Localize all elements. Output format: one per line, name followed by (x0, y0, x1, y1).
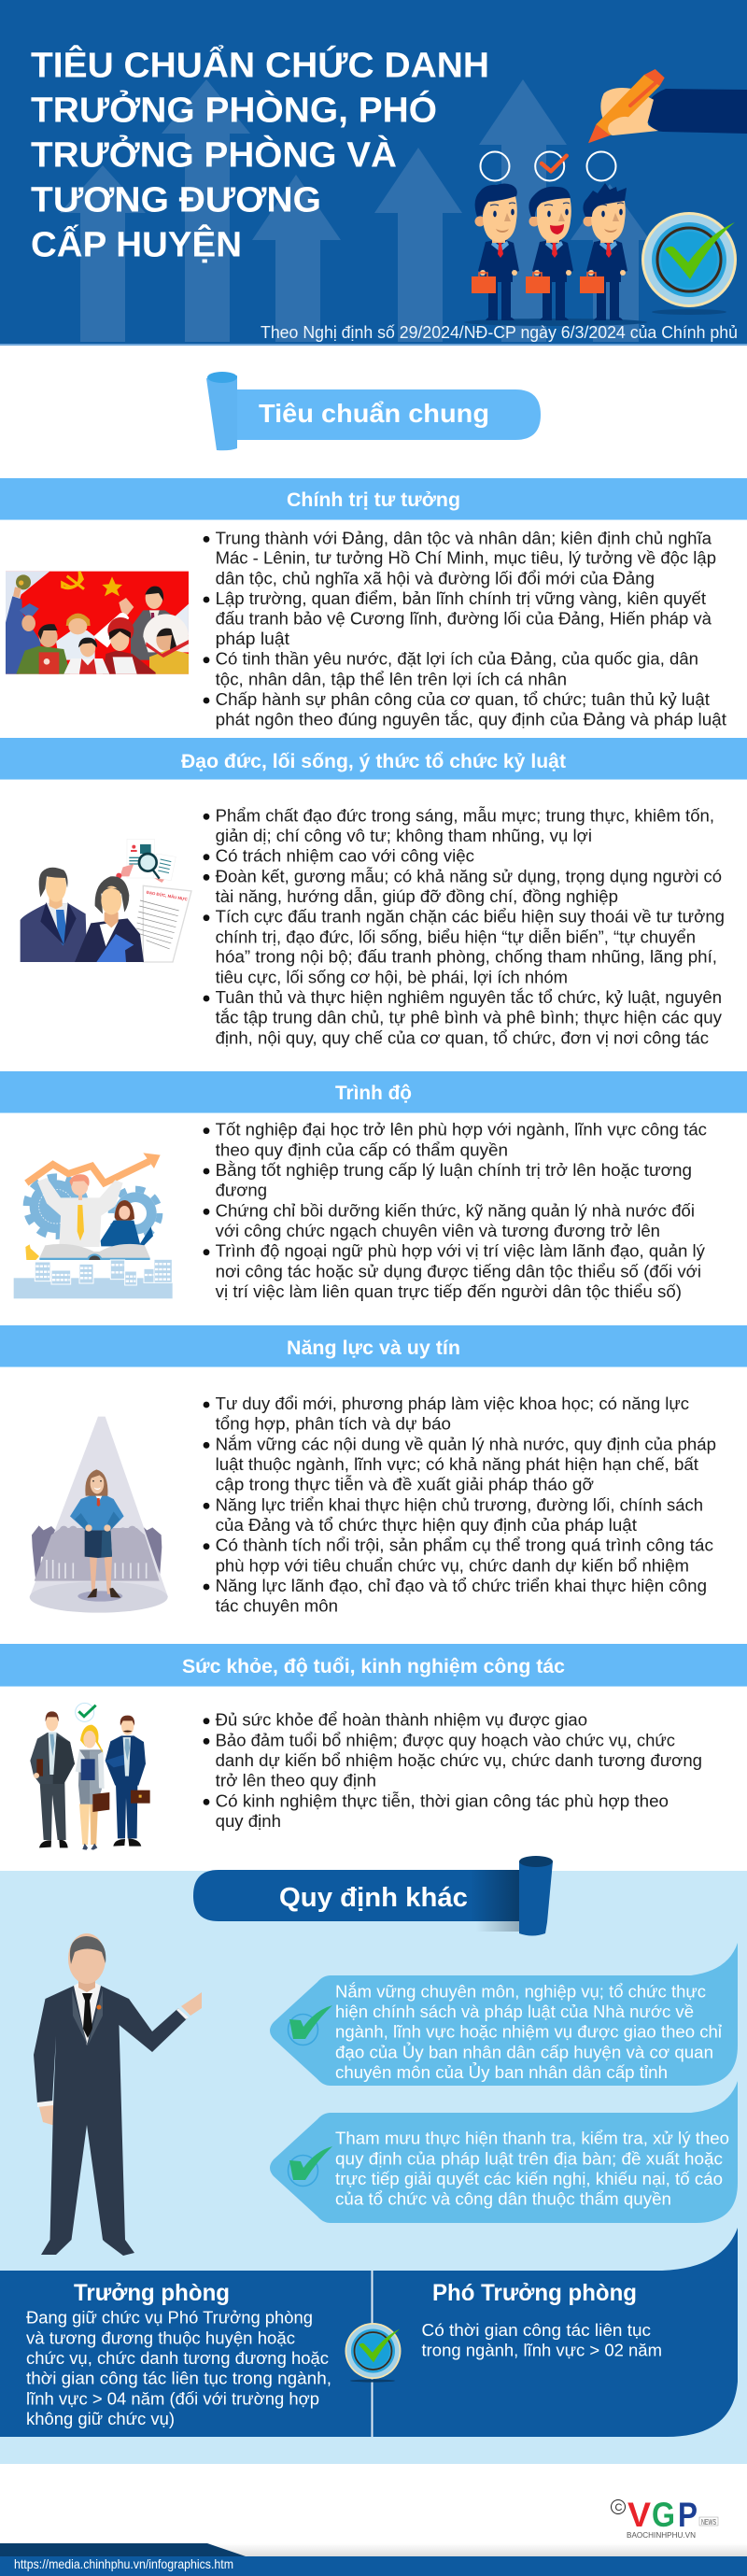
callout text: ngành, lĩnh vực hoặc nhiệm vụ được giao theo chỉ (335, 2023, 722, 2042)
bullet list: phát ngôn theo đúng nguyên tắc, quy định của Đảng và pháp luật (216, 710, 726, 729)
bullet list: quy định (216, 1812, 281, 1831)
panel: Quy định khác (0, 1856, 747, 2464)
bullet list: trở lên theo quy định (216, 1772, 376, 1790)
bullet list: Lập trường, quan điểm, bản lĩnh chính trị vững vàng, kiên quyết (216, 589, 706, 608)
callout text: Nắm vững chuyên môn, nghiệp vụ; tổ chức thực (335, 1981, 706, 2001)
bullet list (204, 805, 725, 1047)
illustration: three professionals (30, 1703, 150, 1850)
heading: Trưởng phòng: Trưởng phòng (74, 2280, 230, 2306)
bullet list: chính trị, đạo đức, lối sống, biểu hiện “tự diễn biến”, “tự chuyển (216, 927, 696, 946)
callout text: Tham mưu thực hiện thanh tra, kiểm tra, xử lý theo (335, 2130, 729, 2148)
title: TƯƠNG ĐƯƠNG (31, 181, 321, 220)
bullet list: cập trong thực tiễn và đề xuất giải pháp tháo gỡ (216, 1475, 594, 1494)
icon: check medal (641, 212, 737, 315)
bullet list: giản dị; chí công vô tư; không tham nhũng, vụ lợi (216, 827, 592, 845)
section heading: Chính trị tư tưởng (287, 489, 460, 511)
bullet list: tắc tập trung dân chủ, tự phê bình và phê bình; thực hiện các quy (216, 1008, 722, 1027)
bullet list: dân tộc, chủ nghĩa xã hội và đường lối đổi mới của Đảng (216, 569, 655, 587)
subtitle: Theo Nghị định số 29/2024/NĐ-CP ngày 6/3/2024 của Chính phủ (261, 322, 738, 342)
bullet list: Tích cực đấu tranh ngăn chặn các biểu hiện suy thoái về tư tưởng (216, 908, 725, 927)
callout 2 (270, 2081, 738, 2223)
section heading: Sức khỏe, độ tuổi, kinh nghiệm công tác (182, 1656, 565, 1677)
icon: check (288, 2146, 332, 2186)
text: Trưởng phòng: lĩnh vực > 04 năm (đối với trường hợp (26, 2389, 319, 2408)
section heading: Trình độ (335, 1083, 412, 1104)
section heading: Đạo đức, lối sống, ý thức tổ chức kỷ luật (181, 751, 566, 772)
bullet list: Có trách nhiệm cao với công việc (216, 847, 474, 866)
panel: Năng lực và uy tín (0, 1325, 747, 1616)
bullet list (204, 529, 726, 729)
bullet list: Tuân thủ và thực hiện nghiêm nguyên tắc tổ chức, kỷ luật, nguyên (216, 987, 722, 1007)
bullet list: tiêu cực, lối sống cơ hội, bè phái, lợi ích nhóm (216, 968, 568, 986)
illustration: two officials and documents (21, 839, 191, 962)
bullet list: Có thành tích nổi trội, sản phẩm cụ thể trong quá trình công tác (216, 1536, 713, 1555)
bullet list: nơi công tác hoặc sử dụng được tiếng dân tộc thiểu số (đối với (216, 1262, 701, 1281)
illustration: propaganda poster (6, 572, 189, 674)
logo: VGP: C (614, 2502, 622, 2513)
title (31, 44, 489, 265)
section heading (0, 1325, 747, 1367)
bullet list: của Đảng và tổ chức thực hiện quy định của pháp luật (216, 1516, 637, 1535)
section heading (0, 1071, 747, 1113)
text: Trưởng phòng (26, 2309, 331, 2428)
bullet list: với công chức ngạch chuyên viên và tương đương trở lên (216, 1222, 660, 1240)
panel: Sức khỏe, độ tuổi, kinh nghiệm (0, 1644, 747, 1850)
panel: Trình độ (0, 1071, 747, 1301)
bullet list: Bằng tốt nghiệp trung cấp lý luận chính trị trở lên hoặc tương (216, 1160, 692, 1180)
bullet list: Phẩm chất đạo đức trong sáng, mẫu mực; trung thực, khiêm tốn, (216, 805, 714, 825)
section heading (0, 478, 747, 520)
bullet list: Bảo đảm tuổi bổ nhiệm; được quy hoạch vào chức vụ, chức (216, 1731, 675, 1749)
bullet list: định, nội quy, quy chế của cơ quan, tổ chức, đơn vị nơi công tác (216, 1028, 709, 1047)
bullet list: Có tinh thần yêu nước, đặt lợi ích của Đảng, của quốc gia, dân (216, 650, 698, 669)
bullet list: vị trí việc làm liên quan trực tiếp đến người dân tộc thiểu số) (216, 1282, 682, 1301)
callout text: trực tiếp giải quyết các kiến nghị, khiếu nại, tố cáo (335, 2170, 723, 2188)
footer url: https://media.chinhphu.vn/infographics.htm (14, 2556, 233, 2571)
section heading: Năng lực và uy tín (287, 1338, 460, 1359)
callout text: chuyên môn của Ủy ban nhân dân cấp tỉnh (335, 2062, 668, 2082)
figures: three candidates (464, 183, 647, 326)
logo: VGP: NEWS (701, 2518, 716, 2526)
heading: Quy định khác: Quy định khác (279, 1883, 468, 1913)
bullet list: danh dự kiến bổ nhiệm hoặc chức vụ, chức danh tương đương (216, 1751, 702, 1770)
bullet list: Trung thành với Đảng, dân tộc và nhân dân; kiên định chủ nghĩa (216, 529, 712, 547)
title: TIÊU CHUẨN CHỨC DANH (31, 44, 489, 86)
callout 1 (270, 1943, 738, 2086)
title: TRƯỞNG PHÒNG, PHÓ (31, 90, 437, 131)
callout text (335, 1981, 722, 2082)
icon: check medal (345, 2323, 401, 2382)
bullet list: Mác - Lênin, tư tưởng Hồ Chí Minh, mục tiêu, lý tưởng về độc lập (216, 549, 716, 568)
bullet list: đấu tranh bảo vệ Cương lĩnh, đường lối của Đảng, Hiến pháp và (216, 609, 712, 628)
icon: selection circles (480, 151, 616, 181)
text: Phó Trưởng phòng (422, 2321, 662, 2360)
bullet list: Có kinh nghiệm thực tiễn, thời gian công tác phù hợp theo (216, 1790, 669, 1810)
illustration: two officials and documents: ĐẠO ĐỨC, MẪU MỰC (146, 890, 188, 901)
title: CẤP HUYỆN (31, 224, 242, 265)
callout text (335, 2130, 729, 2209)
background arrows (60, 79, 650, 342)
section heading (0, 738, 747, 780)
heading: Phó Trưởng phòng: Phó Trưởng phòng (432, 2280, 637, 2306)
bullet list: tác chuyên môn (216, 1597, 338, 1616)
text: Trưởng phòng: chức vụ, chức danh tương đương hoặc (26, 2349, 329, 2368)
bullet list: Tư duy đổi mới, phương pháp làm việc khoa học; có năng lực (216, 1394, 689, 1413)
text: Trưởng phòng: và tương đương thuộc huyện hoặc (26, 2328, 295, 2347)
bullet list: Nắm vững các nội dung về quản lý nhà nước, quy định của pháp (216, 1434, 716, 1453)
bullet list: Năng lực triển khai thực hiện chủ trương, đường lối, chính sách (216, 1495, 703, 1514)
illustration: gears, book and city (14, 1153, 173, 1298)
callout text: đạo của Ủy ban nhân dân cấp huyện và cơ quan (335, 2042, 713, 2061)
bullet list: pháp luật (216, 630, 289, 648)
bullet list: luật thuộc ngành, lĩnh vực; có khả năng phát hiện hạn chế, bất (216, 1455, 698, 1474)
footer bar (0, 2543, 747, 2576)
bullet list: tộc, nhân dân, tập thể lên trên lợi ích cá nhân (216, 670, 567, 688)
bullet list: tổng hợp, phân tích và dự báo (216, 1415, 451, 1434)
illustration: businessman (34, 1933, 202, 2256)
bullet list (204, 1711, 702, 1831)
text: Phó Trưởng phòng: Có thời gian công tác liên tục (422, 2321, 651, 2340)
panel: Trưởng phòng / Phó Trưởng phòng (0, 2228, 738, 2437)
bullet list: Chấp hành sự phân công của cơ quan, tổ chức; tuân thủ kỷ luật (216, 690, 710, 709)
heading: Quy định khác (193, 1856, 553, 1935)
callout text: quy định của pháp luật trên địa bàn; đề xuất hoặc (335, 2149, 723, 2168)
logo: VGP: V (627, 2496, 651, 2534)
section heading (0, 1644, 747, 1687)
bullet list: hóa” trong nội bộ; đấu tranh phòng, chống tham nhũng, lãng phí, (216, 948, 717, 967)
bullet list: Chứng chỉ bồi dưỡng kiến thức, kỹ năng quản lý nhà nước đối (216, 1201, 695, 1220)
logo: VGP: G (652, 2496, 675, 2534)
panel: banner (0, 0, 747, 346)
bullet list: Năng lực lãnh đạo, chỉ đạo và tổ chức triển khai thực hiện công (216, 1577, 707, 1595)
text: Trưởng phòng: không giữ chức vụ) (26, 2410, 175, 2428)
icon: check (288, 2005, 332, 2045)
callout text: hiện chính sách và pháp luật của Nhà nước về (335, 2003, 694, 2021)
logo: VGP: P (678, 2496, 698, 2534)
panel: Chính trị tư tưởng (0, 478, 747, 729)
bullet list (204, 1121, 707, 1301)
bullet list: Tốt nghiệp đại học trở lên phù hợp với ngành, lĩnh vực công tác (216, 1121, 707, 1139)
logo: VGP (611, 2496, 718, 2540)
text: Trưởng phòng: thời gian công tác liên tục trong ngành, (26, 2370, 331, 2388)
title: TRƯỞNG PHÒNG VÀ (31, 134, 397, 176)
text: Phó Trưởng phòng: trong ngành, lĩnh vực > 02 năm (422, 2342, 662, 2360)
bullet list: Đủ sức khỏe để hoàn thành nhiệm vụ được giao (216, 1711, 587, 1730)
bullet list: Trình độ ngoại ngữ phù hợp với vị trí việc làm lãnh đạo, quản lý (216, 1242, 705, 1261)
bullet list: Đoàn kết, gương mẫu; có khả năng sử dụng, trọng dụng người có (216, 866, 722, 885)
text: Trưởng phòng: Đang giữ chức vụ Phó Trưởng phòng (26, 2309, 313, 2328)
heading: Tiêu chuẩn chung: Tiêu chuẩn chung (259, 399, 489, 428)
bullet list: đương (216, 1182, 267, 1200)
bullet list: theo quy định của cấp có thẩm quyền (216, 1140, 508, 1159)
bullet list: phù hợp với tiêu chuẩn chức vụ, chức danh dự kiến bổ nhiệm (216, 1556, 689, 1575)
callout text: của tổ chức và công dân thuộc thẩm quyền (335, 2190, 671, 2209)
illustration: woman in spotlight (30, 1417, 168, 1613)
bullet list: tài năng, hướng dẫn, giúp đỡ đồng chí, đồng nghiệp (216, 886, 618, 906)
panel: Đạo đức, lối sống (0, 738, 747, 1047)
logo: VGP: BAOCHINHPHU.VN (627, 2530, 696, 2540)
icon: hand with pen (588, 69, 747, 143)
heading: Tiêu chuẩn chung (206, 372, 541, 450)
bullet list (204, 1394, 716, 1616)
